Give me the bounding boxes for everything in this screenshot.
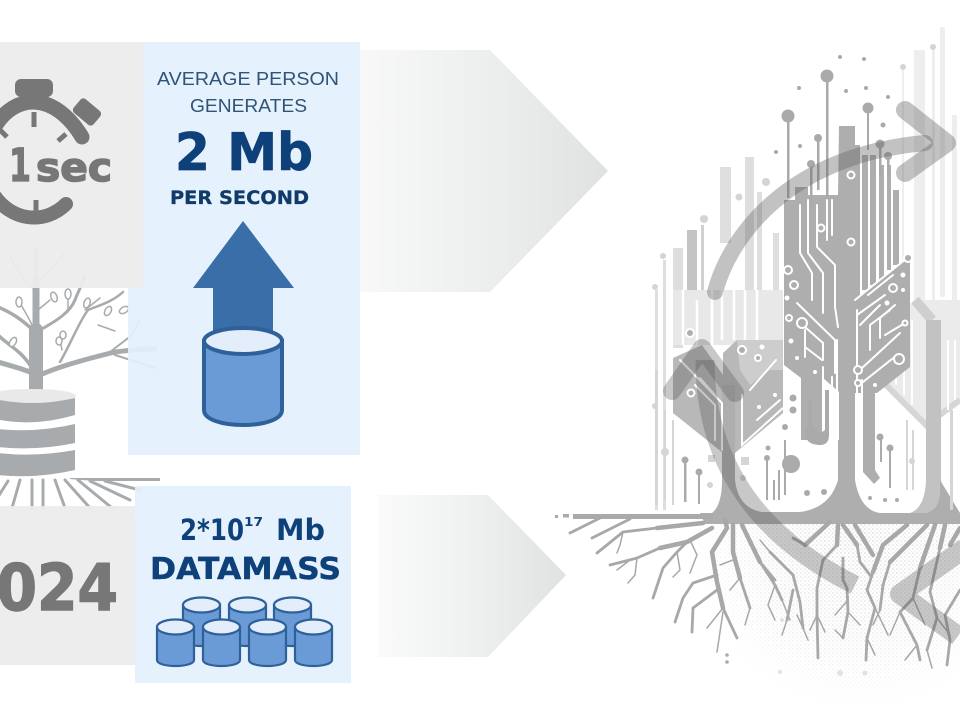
left tree canopy xyxy=(673,340,783,453)
text: 2*10^17 Mb: 17 xyxy=(244,515,263,529)
text: 2 Mb: 2 Mb xyxy=(175,123,313,183)
stippling xyxy=(704,524,960,694)
chevron 1 xyxy=(360,50,608,292)
text: average person generates: GENERATES xyxy=(190,96,307,116)
panel: gray year xyxy=(0,506,135,665)
background data bars xyxy=(652,27,957,510)
text: per second: PER SECOND xyxy=(170,187,309,209)
text: average person generates: AVERAGE PERSON xyxy=(157,69,339,89)
icon: stopwatch xyxy=(0,79,112,218)
ground line xyxy=(555,514,713,519)
icon: database cylinder xyxy=(204,328,282,425)
roots xyxy=(570,518,960,668)
panel: blue datamass xyxy=(135,486,351,683)
illustration: circuit trees with roots xyxy=(555,27,960,710)
central trunk and canopy xyxy=(784,126,910,484)
stopwatch label: 1 xyxy=(9,139,31,192)
text: 2*10^17 Mb xyxy=(180,513,325,547)
chevron 2 xyxy=(378,495,566,657)
panel: blue per-second xyxy=(128,42,360,455)
curved arrow: bottom right xyxy=(900,548,960,636)
icon: stopwatch: sec xyxy=(36,146,112,191)
icon: database stack xyxy=(157,598,332,666)
circuit traces xyxy=(680,200,907,450)
lower dots and tall pins xyxy=(682,390,899,504)
icon: up arrow xyxy=(193,221,294,345)
pins and dots xyxy=(774,55,892,208)
text: 2*10^17 Mb: 2*10 xyxy=(180,513,244,547)
left tree illustration xyxy=(0,250,160,560)
curved arrow: top xyxy=(715,110,947,292)
panel: gray one-second xyxy=(0,42,143,288)
text: average person generates xyxy=(157,69,339,116)
right tree xyxy=(886,300,960,513)
text: 2*10^17 Mb: Mb xyxy=(276,513,325,547)
text: datamass: DATAMASS xyxy=(150,552,341,587)
curved arrow: bottom left xyxy=(672,348,855,585)
left tree trunk xyxy=(700,385,960,524)
